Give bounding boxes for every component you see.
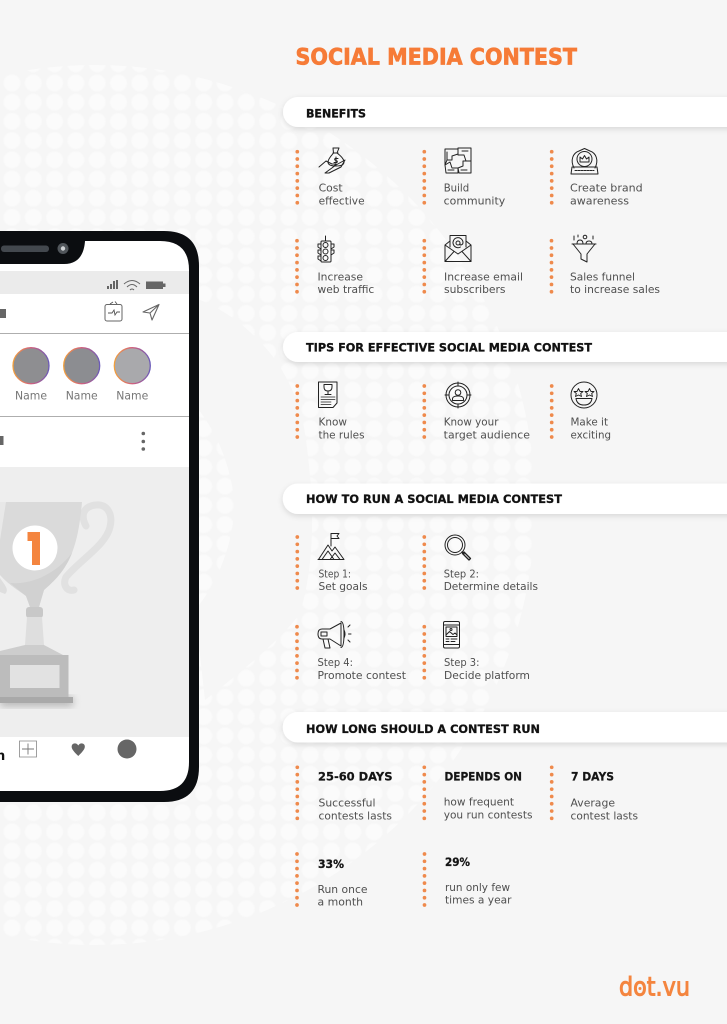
item: step 2: Step 2: — [444, 567, 479, 580]
icon: funnel — [572, 235, 596, 262]
item: cost effective: Cost — [319, 182, 343, 195]
item: create brand awareness — [552, 148, 643, 207]
item: build community: Build — [444, 182, 469, 195]
logo: dot.vu: dot.vu — [619, 973, 690, 1003]
icon: brand badge — [571, 148, 598, 174]
item: know your target audience: target audience — [444, 428, 530, 441]
item: step 1: Set goals — [318, 580, 368, 593]
stat: depends on: DEPENDS ON — [444, 770, 522, 784]
title: SOCIAL MEDIA CONTEST — [296, 45, 577, 70]
item: step 2 — [424, 535, 538, 593]
item: step 1: Step 1: — [318, 567, 351, 580]
stat: depends on: how frequent — [444, 796, 514, 809]
item: step 2: Determine details — [444, 580, 538, 593]
icon: megaphone — [318, 622, 351, 648]
item: know your target audience: Know your — [444, 416, 499, 429]
item: know the rules — [297, 382, 365, 441]
heading: how to run: HOW TO RUN A SOCIAL MEDIA CONTEST — [306, 492, 562, 506]
item: know your target audience — [424, 382, 530, 441]
item: create brand awareness: awareness — [570, 194, 629, 207]
heading: tips — [283, 332, 727, 362]
stat: 25-60 days: contests lasts — [318, 809, 392, 822]
stat: 33%: Run once — [318, 883, 368, 896]
item: know the rules: Know — [318, 416, 347, 429]
item: build community: community — [444, 194, 506, 207]
icon: star-eyes face — [571, 382, 597, 408]
item: step 3: Decide platform — [444, 669, 530, 682]
panel: benefits — [283, 97, 727, 296]
heading: how to run — [283, 484, 727, 514]
stat: 25-60 days: Successful — [318, 797, 376, 810]
item: know the rules: the rules — [318, 428, 365, 441]
story avatars: Name — [66, 388, 98, 402]
panel: tips — [283, 332, 727, 441]
stat: 29%: run only few — [445, 881, 510, 894]
item: increase web traffic — [297, 236, 374, 296]
background dot pattern — [0, 60, 540, 950]
item: make it exciting: exciting — [570, 428, 611, 441]
panel: how long — [283, 712, 727, 909]
icon: traffic light — [318, 236, 334, 262]
top nav row — [0, 302, 159, 321]
stat: 7 days: Average — [570, 797, 615, 810]
item: step 3: Step 3: — [444, 656, 480, 669]
item: make it exciting — [552, 382, 611, 441]
icon: flag on mountain — [318, 534, 344, 560]
stat: 29% — [424, 854, 512, 907]
icon: money bag in hand — [319, 148, 345, 173]
post action bar — [0, 740, 136, 760]
stat: 7 days: 7 DAYS — [571, 770, 614, 784]
panel: how to run — [283, 484, 727, 682]
stat: 33%: 33% — [318, 857, 344, 871]
heading: how long: HOW LONG SHOULD A CONTEST RUN — [306, 722, 540, 736]
icon: magnifier — [445, 535, 470, 560]
heading: benefits — [283, 97, 727, 127]
stat: 29%: times a year — [445, 894, 512, 907]
phone mockup — [0, 231, 199, 802]
item: step 4: Promote contest — [318, 669, 406, 682]
item: increase email subscribers: Increase email — [444, 270, 523, 283]
item: sales funnel — [552, 235, 660, 296]
item: step 4 — [297, 622, 406, 682]
icon: envelope — [445, 236, 471, 262]
stat: 7 days — [552, 767, 638, 822]
item: increase web traffic: web traffic — [318, 283, 374, 296]
stat: 25-60 days: 25-60 DAYS — [318, 770, 392, 784]
heading: tips: TIPS FOR EFFECTIVE SOCIAL MEDIA CONTEST — [306, 341, 592, 355]
item: cost effective — [297, 148, 365, 207]
status bar — [0, 271, 190, 294]
item: step 1 — [297, 534, 368, 593]
item: increase email subscribers — [424, 236, 523, 296]
item: create brand awareness: Create brand — [570, 182, 643, 195]
post image with trophy — [0, 467, 190, 737]
item: build community — [424, 148, 506, 207]
item: make it exciting: Make it — [570, 416, 608, 429]
icon: target audience — [445, 382, 471, 408]
story avatars: Name — [15, 388, 47, 402]
trophy number badge — [12, 526, 58, 570]
stat: 25-60 days — [297, 767, 392, 822]
item: sales funnel: Sales funnel — [570, 270, 635, 283]
item: increase web traffic: Increase — [318, 270, 363, 283]
stat: 33% — [297, 854, 368, 909]
item: step 3 — [424, 622, 530, 682]
item: step 4: Step 4: — [318, 656, 353, 669]
item: sales funnel: to increase sales — [570, 283, 660, 296]
phone screen — [0, 241, 190, 791]
story avatars — [13, 348, 150, 402]
trophy number badge: 1 — [26, 522, 42, 574]
icon: phone with post — [444, 622, 460, 648]
phone frame — [0, 231, 199, 802]
stat: depends on: you run contests — [444, 808, 533, 821]
item: increase email subscribers: subscribers — [444, 283, 506, 296]
stat: 33%: a month — [318, 896, 363, 909]
stat: depends on — [424, 767, 533, 821]
story avatars: Name — [116, 388, 148, 402]
icon: rules document — [318, 382, 337, 408]
stat: 7 days: contest lasts — [570, 809, 638, 822]
item: cost effective: effective — [319, 194, 365, 207]
post header — [0, 432, 145, 451]
phone notch — [0, 241, 85, 264]
stat: 29%: 29% — [445, 855, 470, 869]
heading: how long — [283, 712, 727, 742]
icon: linked hands — [445, 148, 471, 173]
heading: benefits: BENEFITS — [306, 106, 366, 120]
